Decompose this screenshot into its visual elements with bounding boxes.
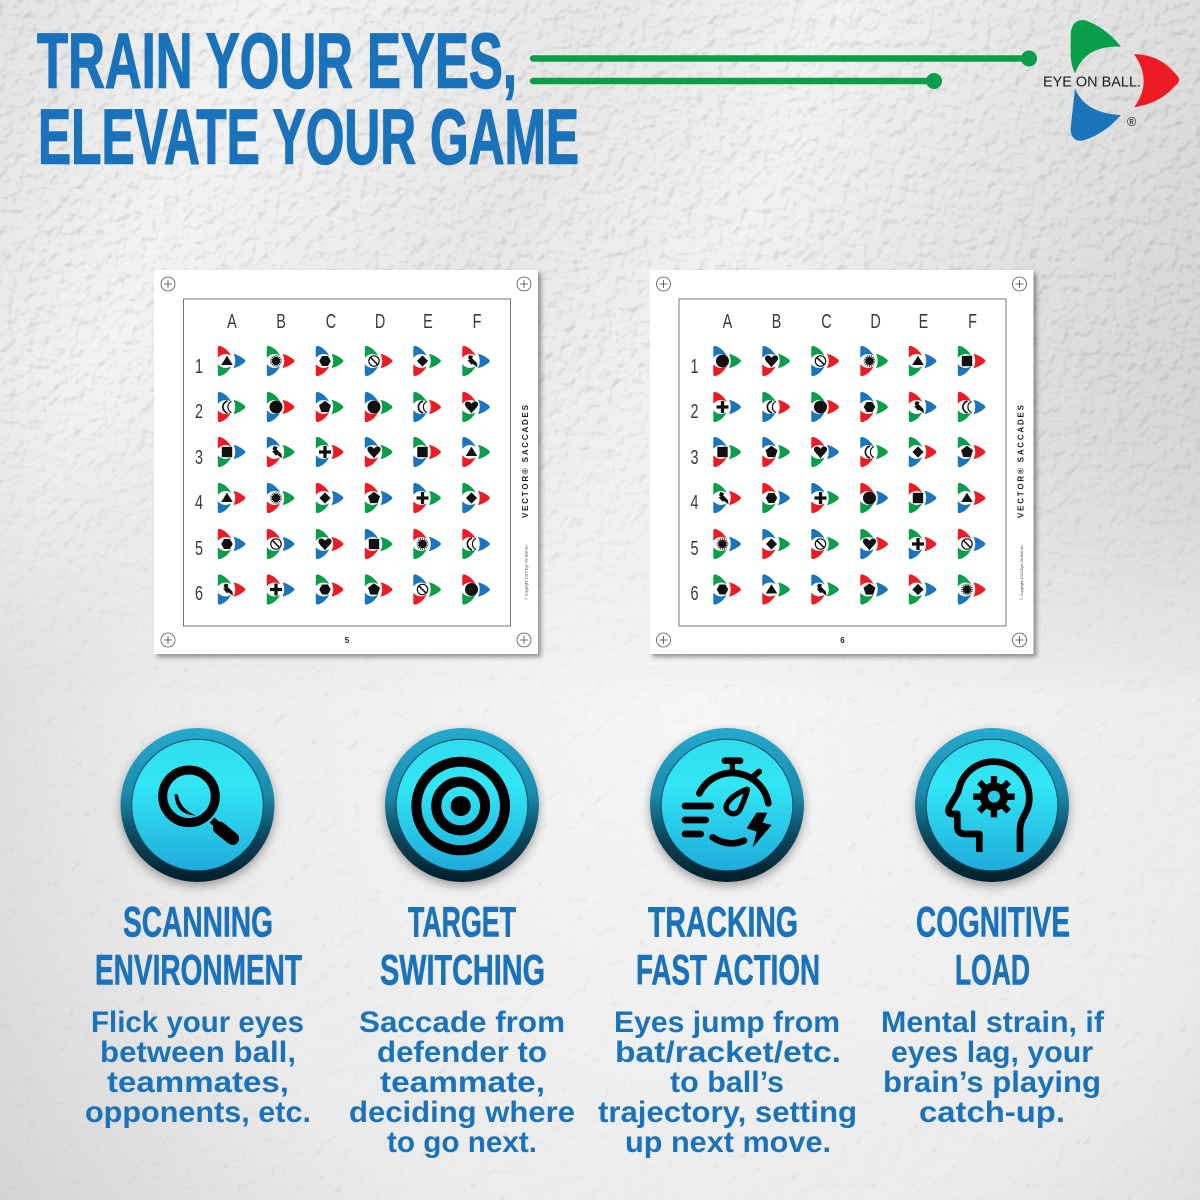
column letters: F [968,310,977,333]
row numbers: 2 [691,400,699,423]
column letters: C [326,310,336,333]
description [881,1006,1105,1129]
column letters: A [723,310,733,333]
row numbers: 4 [195,491,203,514]
copyright note: © Copyright 2023 Eye On Ball Inc. [524,544,528,600]
title: ELEVATE YOUR GAME [38,92,579,180]
panel: saccades chart page 6 [650,270,1034,654]
heading: ENVIRONMENT [95,948,302,994]
vertical product label: VECTOR® SACCADES [1016,404,1026,518]
description [349,1006,575,1159]
description: Eyes jump from [614,1006,840,1039]
column letters [227,310,481,333]
column letters: C [821,310,832,333]
title [37,16,579,180]
row 2 targets [713,392,985,422]
column letters: D [375,310,385,333]
column letters [723,310,977,333]
heading [916,900,1070,994]
column letters: D [870,310,881,333]
row 4 targets [218,483,490,513]
description: bat/racket/etc. [615,1036,841,1069]
row numbers: 6 [691,582,699,605]
description: to go next. [387,1126,537,1159]
description: between ball, [100,1036,296,1069]
row numbers [691,355,699,605]
description: trajectory, setting [598,1096,857,1129]
heading [95,900,302,994]
column letters: B [276,310,286,333]
description: opponents, etc. [85,1096,311,1129]
description: deciding where [349,1096,575,1129]
description: teammates, [107,1066,289,1099]
row 3 targets [713,437,985,467]
heading: TRACKING [648,900,798,946]
panel: saccades chart page 5 [154,270,538,654]
vertical product label: VECTOR® SACCADES [521,404,530,518]
row numbers: 2 [195,400,203,423]
title: TRAIN YOUR EYES, [37,16,517,104]
logo: Eye On Ball: EYE ON BALL. [1043,74,1141,90]
row 6 targets [218,574,490,605]
row 2 targets [218,392,490,422]
icon: head with gear button [915,728,1069,882]
row numbers: 1 [195,355,203,378]
row numbers: 5 [691,537,699,560]
panel: target switching [349,728,575,1159]
row numbers: 3 [691,446,699,469]
row numbers: 6 [195,582,203,605]
icon: magnifying glass button [120,728,274,882]
description: Mental strain, if [881,1006,1105,1039]
icon: target button [385,728,539,882]
heading: FAST ACTION [636,948,820,994]
row numbers: 1 [691,355,699,378]
column letters: B [772,310,781,333]
icon: stopwatch button [650,728,804,882]
description: eyes lag, your [891,1036,1093,1069]
description: brain’s playing [883,1066,1101,1099]
description: to ball’s [670,1066,784,1099]
panel: tracking fast action [598,728,857,1159]
heading: SCANNING [123,900,273,946]
heading: SWITCHING [380,948,545,994]
column letters: E [919,310,928,333]
row numbers: 4 [691,491,699,514]
column letters: A [227,310,237,333]
description: catch-up. [919,1096,1065,1129]
heading [380,900,545,994]
green pointer lines [533,50,1037,89]
row 5 targets [218,529,490,559]
page number: 6 [840,636,845,645]
heading: COGNITIVE [916,900,1070,946]
column letters: E [423,310,433,333]
column letters: F [473,310,481,333]
row 3 targets [218,437,490,467]
row numbers [195,355,203,605]
copyright note: © Copyright 2023 Eye On Ball Inc. [1020,544,1024,600]
logo: Eye On Ball [1043,20,1179,141]
description: Flick your eyes [91,1006,304,1039]
page number: 5 [345,636,350,645]
row 4 targets [713,483,985,513]
row numbers: 3 [195,446,203,469]
logo: Eye On Ball: ® [1127,115,1137,129]
panel: cognitive load [881,728,1105,1129]
description [85,1006,311,1129]
row 5 targets [713,529,985,559]
heading: LOAD [955,948,1030,994]
description: teammate, [380,1066,545,1099]
row 6 targets [713,574,985,605]
panel: scanning environment [85,728,311,1129]
row numbers: 5 [195,537,203,560]
row 1 targets [713,346,985,376]
heading: TARGET [408,900,516,946]
heading [636,900,820,994]
description: up next move. [625,1126,831,1159]
description [598,1006,857,1159]
description: Saccade from [359,1006,565,1039]
row 1 targets [218,346,490,376]
description: defender to [377,1036,547,1069]
